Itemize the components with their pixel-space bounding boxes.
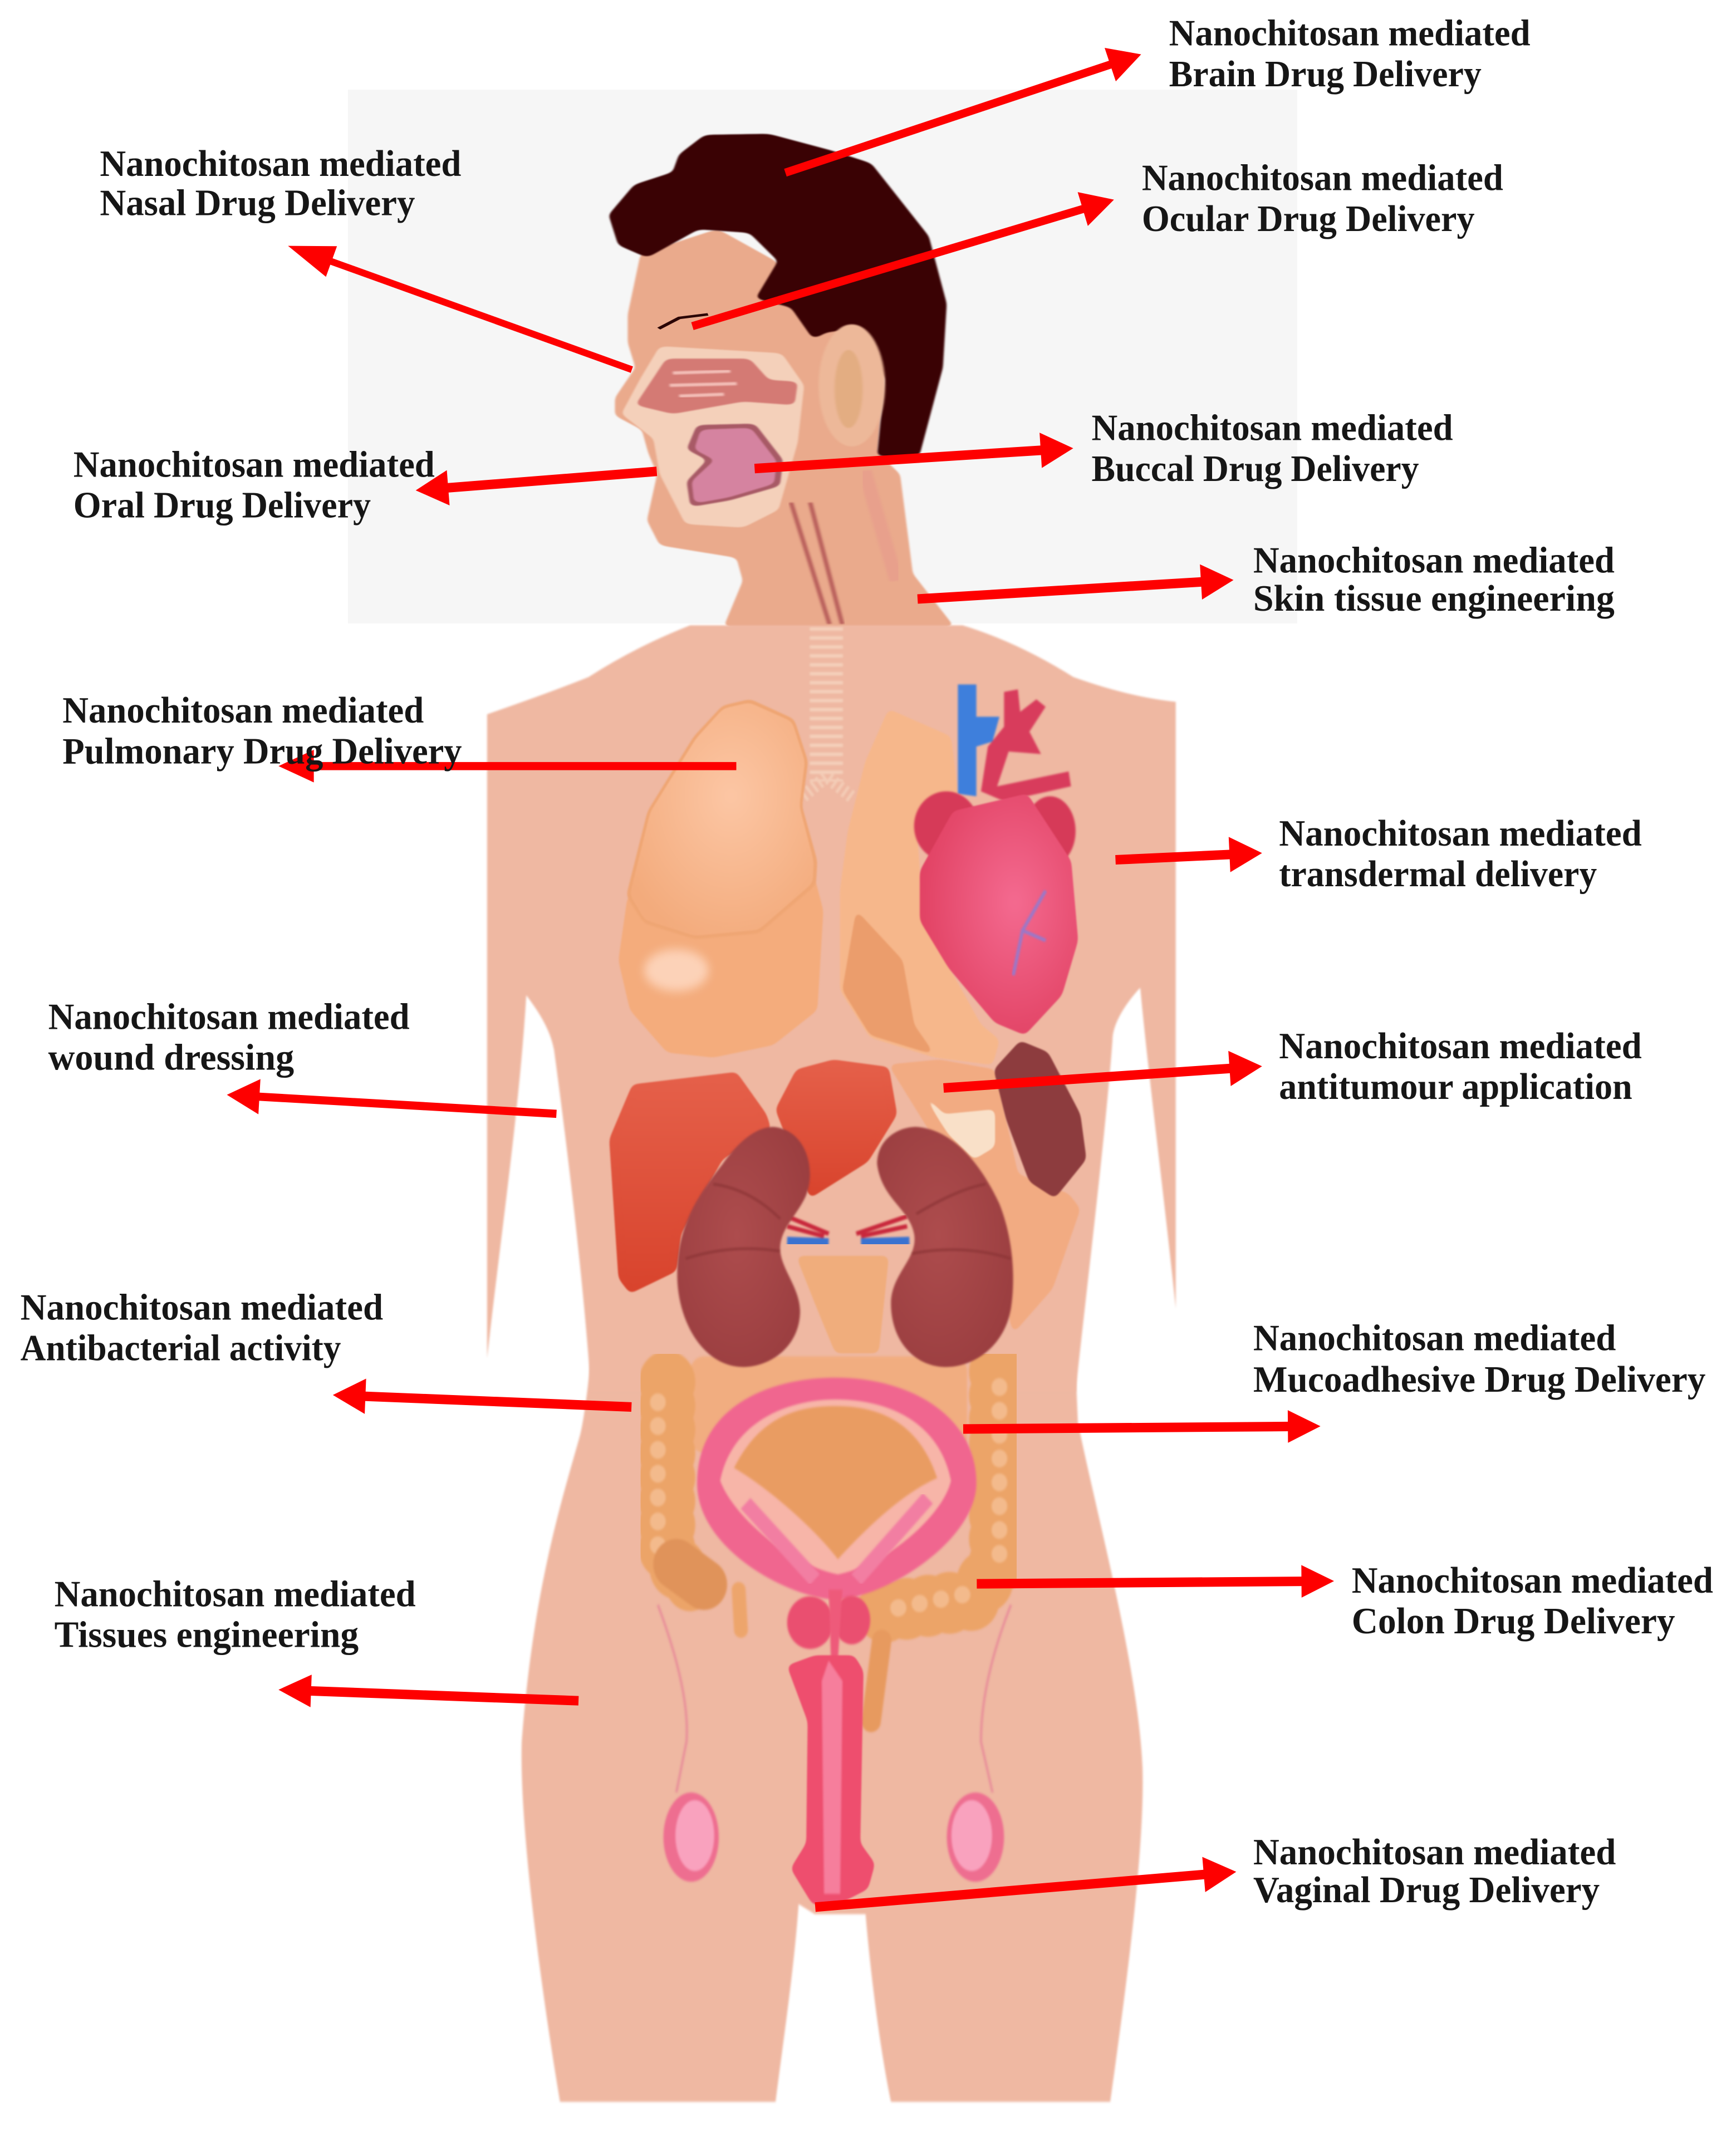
- label: nasal: [100, 143, 461, 224]
- arrow: ocular: [687, 183, 1119, 343]
- label: skin: Nanochitosan mediated: [1253, 539, 1615, 581]
- label: mucoadhesive: Mucoadhesive Drug Delivery: [1253, 1358, 1705, 1400]
- label: transdermal: Nanochitosan mediated: [1279, 812, 1642, 854]
- label: pulmonary: Pulmonary Drug Delivery: [62, 730, 462, 772]
- label: antibacterial: Nanochitosan mediated: [21, 1286, 383, 1328]
- arrow: buccal: [753, 431, 1075, 486]
- trachea: [803, 627, 854, 799]
- label: ocular: Nanochitosan mediated: [1142, 157, 1503, 199]
- prostate and urethra: [787, 1590, 875, 1907]
- illustration: pelvic organs: [658, 1372, 1011, 1907]
- arrow: mucoadhesive: [963, 1410, 1321, 1445]
- panel: head background: [348, 90, 1297, 623]
- inner head tissue: [622, 346, 804, 528]
- label: transdermal: transdermal delivery: [1279, 853, 1597, 895]
- label: antitumour: Nanochitosan mediated: [1279, 1025, 1642, 1067]
- label: nasal: Nanochitosan mediated: [100, 143, 461, 184]
- arrow: nasal: [282, 230, 637, 385]
- label: vaginal: [1253, 1831, 1616, 1911]
- label: buccal: [1092, 407, 1453, 489]
- label: vaginal: Nanochitosan mediated: [1253, 1831, 1616, 1873]
- right lung: [619, 699, 823, 1057]
- arrow: wound dressing: [226, 1077, 557, 1131]
- left lung: [840, 709, 999, 1065]
- label: brain: Brain Drug Delivery: [1169, 53, 1482, 95]
- bladder: [697, 1378, 977, 1600]
- label: ocular: [1142, 157, 1503, 239]
- label: oral: Oral Drug Delivery: [73, 484, 371, 526]
- arrow: antibacterial: [332, 1377, 632, 1425]
- label: antibacterial: [21, 1286, 383, 1369]
- label: oral: Nanochitosan mediated: [73, 443, 435, 485]
- label: skin: Skin tissue engineering: [1253, 577, 1615, 619]
- label: skin: [1253, 539, 1615, 619]
- heart: [914, 684, 1078, 1035]
- arrow: pulmonary: [278, 750, 736, 782]
- label: wound dressing: [48, 995, 410, 1078]
- arrow: transdermal: [1115, 836, 1263, 877]
- nasal cavity: [636, 359, 797, 414]
- label: tissues: [55, 1573, 416, 1655]
- liver: [610, 1060, 897, 1293]
- illustration: head and neck cross-section: [609, 134, 954, 627]
- arrow: colon: [977, 1565, 1334, 1600]
- colon: [658, 1372, 999, 1721]
- kidneys: [677, 1127, 1013, 1367]
- label: antitumour: [1279, 1025, 1642, 1107]
- label: antibacterial: Antibacterial activity: [21, 1327, 341, 1369]
- label: brain: [1169, 12, 1531, 95]
- arrow: antitumour: [943, 1049, 1263, 1106]
- arrow: brain: [780, 38, 1147, 189]
- label: pulmonary: [62, 689, 462, 772]
- illustration: thoracic and abdominal organs: [610, 627, 1086, 1367]
- right testis and cord: [947, 1605, 1011, 1882]
- label: wound dressing: Nanochitosan mediated: [48, 995, 410, 1037]
- oral cavity and tongue: [687, 424, 783, 507]
- arrow: oral: [414, 454, 658, 508]
- body: hips and legs: [522, 1336, 1142, 2102]
- ear: [818, 325, 885, 446]
- label: wound dressing: wound dressing: [48, 1036, 294, 1078]
- eyebrow: [659, 315, 708, 328]
- hair: [609, 134, 947, 456]
- spleen: [994, 1041, 1086, 1198]
- label: mucoadhesive: [1253, 1317, 1705, 1400]
- label: colon: Nanochitosan mediated: [1352, 1559, 1713, 1601]
- stomach and pancreas: [889, 1060, 1080, 1333]
- label: ocular: Ocular Drug Delivery: [1142, 198, 1475, 239]
- label: pulmonary: Nanochitosan mediated: [62, 689, 424, 731]
- label: buccal: Nanochitosan mediated: [1092, 407, 1453, 449]
- left testis and cord: [658, 1605, 719, 1882]
- label: nasal: Nasal Drug Delivery: [100, 182, 415, 224]
- label: antitumour: antitumour application: [1279, 1066, 1632, 1107]
- face and neck skin: [615, 229, 954, 627]
- label: buccal: Buccal Drug Delivery: [1092, 448, 1419, 489]
- arrow: vaginal: [814, 1854, 1238, 1924]
- label: oral: [73, 443, 435, 526]
- label: colon: [1352, 1559, 1713, 1642]
- label: transdermal: [1279, 812, 1642, 895]
- body: shoulders, arms and chest: [487, 625, 1176, 1392]
- arrow: skin: [916, 562, 1234, 617]
- arrow: tissues: [278, 1673, 579, 1717]
- central vessels and aorta: [796, 1256, 889, 1353]
- label: colon: Colon Drug Delivery: [1352, 1600, 1675, 1642]
- label: brain: Nanochitosan mediated: [1169, 12, 1531, 54]
- label: vaginal: Vaginal Drug Delivery: [1253, 1869, 1600, 1911]
- label: tissues: Tissues engineering: [55, 1613, 359, 1655]
- label: tissues: Nanochitosan mediated: [55, 1573, 416, 1614]
- label: mucoadhesive: Nanochitosan mediated: [1253, 1317, 1616, 1358]
- throat: [791, 503, 842, 624]
